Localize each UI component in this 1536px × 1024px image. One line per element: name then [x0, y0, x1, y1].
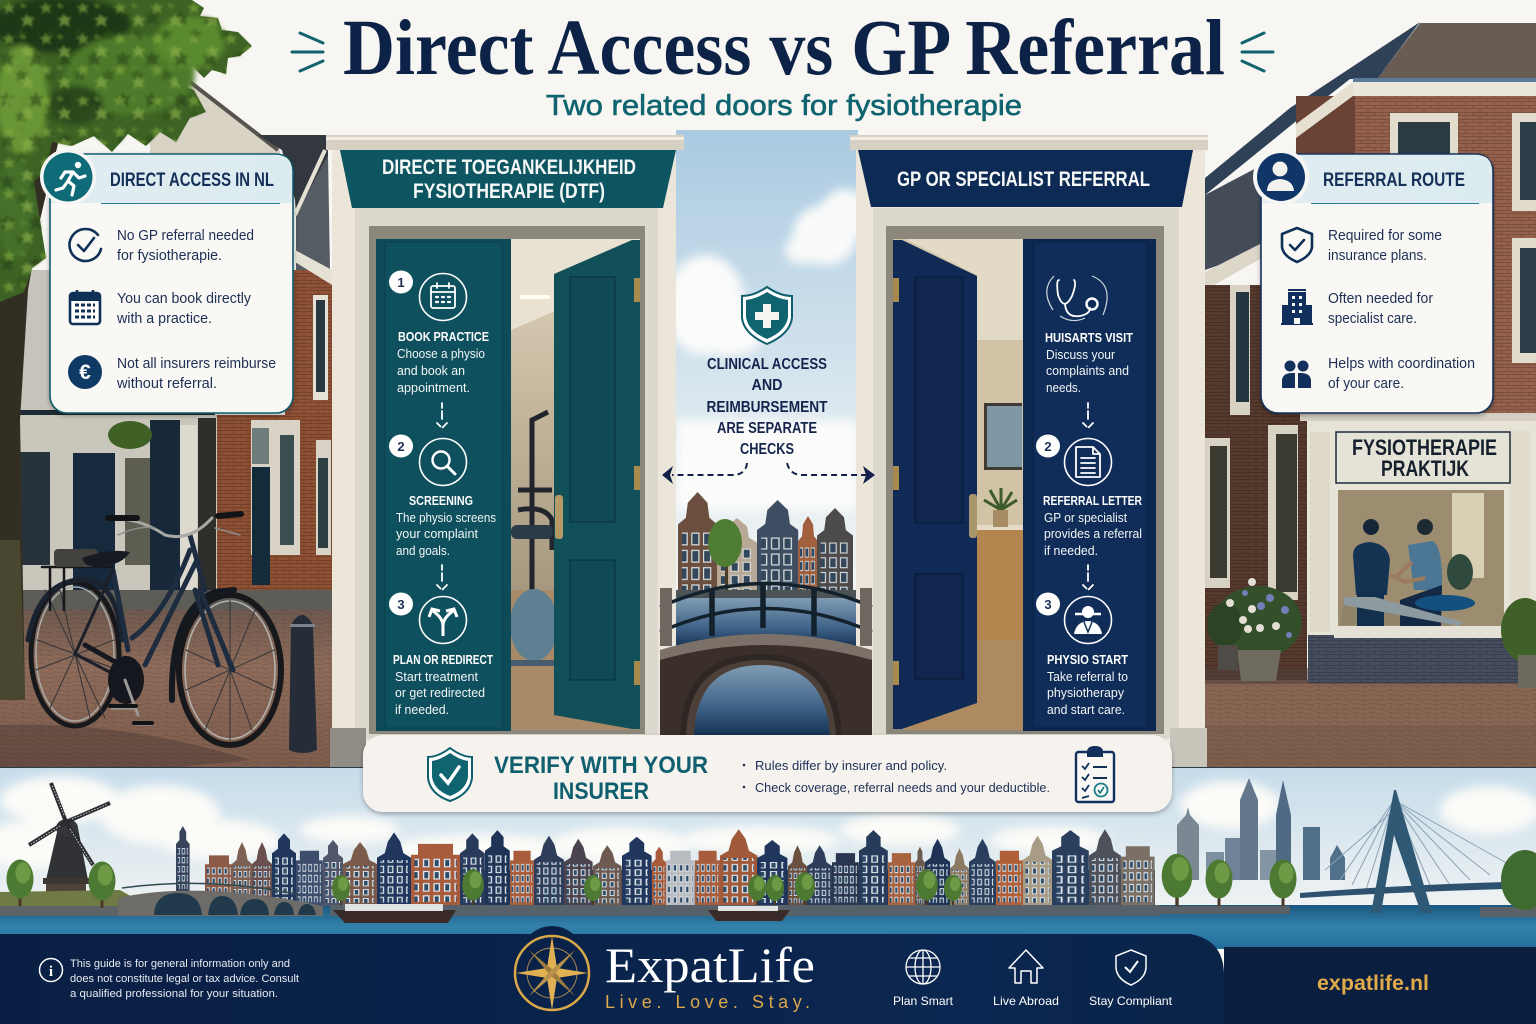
card: referral route: Required for some [1328, 228, 1442, 244]
icon: hospital building [1281, 289, 1313, 325]
step 2: screening: SCREENING [409, 494, 473, 508]
card: direct access in NL: You can book directly [117, 291, 252, 307]
canal bridge [660, 582, 872, 736]
central sky and canal view [665, 130, 870, 600]
step 1: huisarts visit: complaints and [1046, 364, 1129, 378]
step 3: plan or redirect: PLAN OR REDIRECT [393, 653, 493, 667]
card: direct access in NL: without referral. [116, 376, 217, 392]
arch bridge [118, 883, 323, 916]
card: referral route: Helps with coordination [1328, 356, 1475, 372]
brand name: ExpatLife [605, 937, 815, 993]
card: direct access in NL: with a practice. [116, 311, 212, 327]
card: referral route: of your care. [1328, 376, 1404, 392]
bottom panorama [0, 767, 1536, 949]
step 1: book practice: and book an [397, 364, 465, 378]
verify with your insurer card: INSURER [553, 778, 649, 805]
open teal door [554, 240, 640, 729]
tagline: Live. Love. Stay. [605, 992, 810, 1012]
teal door panel with steps [376, 239, 511, 731]
disclaimer: a qualified professional for your situation. [70, 988, 278, 1000]
icon: clipboard [1076, 746, 1114, 802]
bicycle [28, 514, 281, 745]
verify with your insurer card [363, 735, 1172, 812]
step 2: referral letter: 2 [1044, 439, 1052, 454]
icon: shield check [1282, 228, 1312, 262]
icon: euro [68, 355, 102, 389]
interior room [510, 239, 640, 730]
canal houses centre [660, 492, 872, 648]
step 2: referral letter: GP or specialist [1044, 511, 1127, 525]
quay and boats [330, 904, 1290, 923]
step 1: huisarts visit: needs. [1046, 381, 1081, 395]
DTF banner [340, 150, 676, 208]
step 3: physio start: 3 [1044, 597, 1052, 612]
step 3: plan or redirect: if needed. [395, 703, 449, 717]
disclaimer: does not constitute legal or tax advice. Consult [70, 973, 299, 985]
shop window [1338, 490, 1504, 626]
icon: globe [906, 950, 940, 984]
island and trees [0, 860, 150, 916]
centre message: ARE SEPARATE [717, 420, 817, 437]
DTF banner: DIRECTE TOEGANKELIJKHEID [382, 156, 636, 179]
icon: check [70, 229, 101, 261]
insurer notes [743, 758, 1050, 795]
centre message: CHECKS [740, 441, 794, 458]
subtitle: Two related doors for fysiotherapie [546, 90, 1022, 122]
step 2: screening [389, 434, 496, 558]
step 2: screening: your complaint [396, 527, 479, 541]
footer [0, 926, 1536, 1024]
shop front fysiotherapie praktijk: PRAKTIJK [1381, 456, 1469, 481]
insurer notes: Check coverage, referral needs and your deductible. [755, 780, 1050, 795]
water [0, 905, 1536, 949]
canal house row [176, 826, 1155, 906]
icon: euro: € [79, 361, 91, 384]
icon: shield [1116, 950, 1146, 985]
disclaimer [40, 958, 299, 1000]
centre message: AND [752, 377, 782, 394]
card: direct access in NL [40, 149, 293, 413]
icon: doctor [1253, 149, 1309, 205]
step 1: book practice [389, 270, 489, 395]
shop front fysiotherapie praktijk [1300, 413, 1536, 683]
icon: runner [40, 149, 96, 205]
step 1: huisarts visit: Discuss your [1046, 348, 1115, 362]
card: referral route: specialist care. [1328, 311, 1417, 327]
street scene right [1205, 22, 1536, 770]
step 2: screening: 2 [397, 439, 405, 454]
left doorway [326, 135, 684, 768]
arrow [437, 403, 447, 428]
step 2: referral letter [1036, 434, 1142, 558]
verify with your insurer card: VERIFY WITH YOUR [494, 752, 708, 779]
card: referral route: insurance plans. [1328, 248, 1427, 264]
GP banner [858, 150, 1193, 207]
open navy door [893, 240, 977, 729]
icon: house [1009, 950, 1043, 983]
bollard [289, 615, 317, 753]
step 3: physio start [1036, 592, 1128, 717]
step 3: physio start: and start care. [1047, 703, 1125, 717]
disclaimer: i [49, 964, 53, 980]
card: referral route [1253, 149, 1493, 413]
step 3: physio start: physiotherapy [1047, 686, 1125, 700]
centre message [706, 356, 828, 458]
card: direct access in NL: No GP referral needed [117, 228, 254, 244]
step 3: physio start: Take referral to [1047, 670, 1128, 684]
card: direct access in NL: DIRECT ACCESS IN NL [110, 170, 274, 191]
icon: shield check [428, 748, 472, 801]
centre message: REIMBURSEMENT [706, 399, 828, 416]
step 2: screening: and goals. [396, 544, 450, 558]
step 3: plan or redirect: Start treatment [395, 670, 479, 684]
insurer notes: Rules differ by insurer and policy. [755, 758, 947, 773]
icon: calendar [70, 290, 100, 324]
step 2: referral letter: REFERRAL LETTER [1043, 494, 1142, 508]
step 1: book practice: appointment. [397, 381, 470, 395]
card: direct access in NL: Not all insurers reimburse [117, 356, 276, 372]
step 2: referral letter: provides a referral [1044, 527, 1142, 541]
shop front fysiotherapie praktijk: FYSIOTHERAPIE [1352, 435, 1497, 460]
GP banner: GP OR SPECIALIST REFERRAL [897, 168, 1150, 191]
skyscrapers [1162, 778, 1345, 906]
step 2: referral letter: if needed. [1044, 544, 1098, 558]
centre shield icon [742, 287, 792, 344]
title accent left [292, 33, 323, 71]
street scene left [0, 82, 332, 770]
step 3: physio start: PHYSIO START [1047, 653, 1128, 667]
step 3: plan or redirect [389, 592, 493, 717]
step 3: plan or redirect: or get redirected [395, 686, 485, 700]
arrow [437, 565, 447, 590]
step 3: plan or redirect: 3 [397, 597, 405, 612]
card: direct access in NL: for fysiotherapie. [117, 248, 222, 264]
compass logo [515, 936, 589, 1010]
card: referral route: Often needed for [1328, 291, 1433, 307]
title: Direct Access vs GP Referral [343, 5, 1225, 92]
step 1: huisarts visit [1045, 276, 1133, 395]
tree [0, 0, 252, 700]
navy door panel with steps [1023, 239, 1156, 731]
split arrows [662, 463, 875, 484]
title accent right [1242, 33, 1273, 71]
flower planters [1207, 578, 1536, 688]
cable stayed bridge [1300, 790, 1536, 917]
step 2: screening: The physio screens [396, 511, 496, 525]
label: plan smart: Plan Smart [893, 994, 954, 1008]
arrow [1083, 403, 1093, 428]
icon: people [1282, 360, 1311, 388]
step 1: book practice: Choose a physio [397, 347, 485, 361]
windmill [29, 783, 110, 896]
step 1: book practice: BOOK PRACTICE [398, 330, 489, 344]
website: expatlife.nl [1317, 972, 1429, 995]
disclaimer: This guide is for general information only and [70, 958, 290, 970]
label: live abroad: Live Abroad [993, 994, 1059, 1008]
DTF banner: FYSIOTHERAPIE (DTF) [413, 180, 605, 203]
right doorway [850, 135, 1208, 768]
step 1: huisarts visit: HUISARTS VISIT [1045, 331, 1133, 345]
card: referral route: REFERRAL ROUTE [1323, 170, 1465, 191]
label: stay compliant: Stay Compliant [1089, 994, 1173, 1008]
step 1: book practice: 1 [397, 275, 405, 290]
interior office [893, 239, 1023, 730]
centre message: CLINICAL ACCESS [707, 356, 827, 373]
arrow [1083, 565, 1093, 590]
